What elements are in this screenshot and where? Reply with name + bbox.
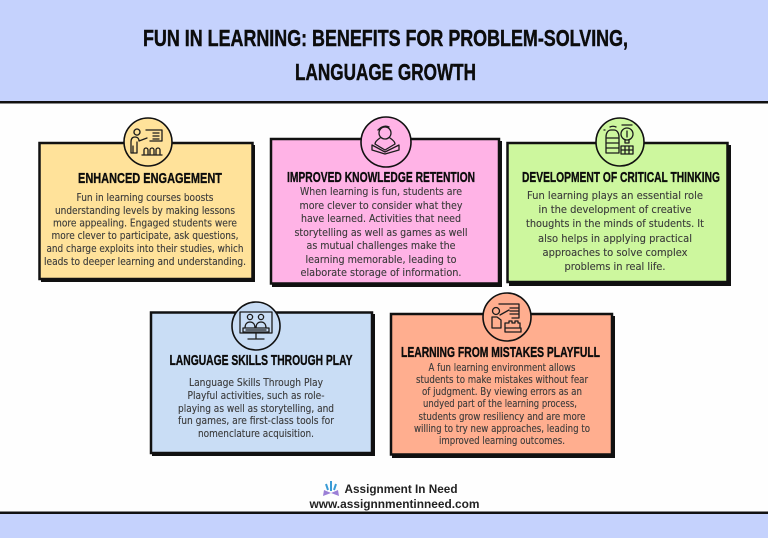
body text: students to make mistakes without fear xyxy=(416,375,589,386)
body text: undyed part of the learning process, xyxy=(423,399,577,410)
title xyxy=(143,25,628,85)
body text: nomenclature acquisition. xyxy=(198,429,314,440)
icon: reader with book xyxy=(361,117,411,167)
body text xyxy=(44,193,246,268)
body text xyxy=(414,363,590,447)
heading: LEARNING FROM MISTAKES PLAYFULL xyxy=(401,344,600,361)
icon: teacher with students xyxy=(124,118,172,166)
body text xyxy=(526,191,704,273)
header band xyxy=(0,0,768,104)
body text: Playful activities, such as role- xyxy=(188,391,325,402)
body text: of judgment. By viewing errors as an xyxy=(422,387,582,398)
body text xyxy=(178,378,335,440)
body text: approaches to solve complex xyxy=(542,248,688,259)
body text: students grow resiliency and are more xyxy=(418,412,586,423)
body text: fun games, are first-class tools for xyxy=(178,416,335,427)
body text: storytelling as well as games as well xyxy=(294,228,468,239)
heading: IMPROVED KNOWLEDGE RETENTION xyxy=(287,169,475,186)
body text: more clever to consider what they xyxy=(300,201,462,212)
body text: in the development of creative xyxy=(538,205,692,216)
body text: learning memorable, leading to xyxy=(306,255,456,266)
body text: thoughts in the minds of students. It xyxy=(526,219,704,230)
body text: have learned. Activities that need xyxy=(301,214,461,225)
icon: brand logo xyxy=(323,481,339,496)
body text: Fun learning plays an essential role xyxy=(527,191,703,202)
body text: Fun in learning courses boosts xyxy=(76,193,214,204)
panel: enhanced engagement xyxy=(40,118,255,282)
panel: language skills through play xyxy=(151,302,375,456)
body text: and charge exploits into their studies, which xyxy=(46,244,244,255)
body text: When learning is fun, students are xyxy=(300,187,462,198)
body text: willing to try new approaches, leading to xyxy=(414,424,590,435)
panel: development of critical thinking xyxy=(508,118,731,286)
body text: understanding levels by making lessons xyxy=(55,206,235,217)
body text: also helps in applying practical xyxy=(538,234,692,245)
panel: improved knowledge retention xyxy=(271,117,502,287)
brand name and website: Assignment In Need xyxy=(344,482,458,496)
body text: A fun learning environment allows xyxy=(428,363,576,374)
body text xyxy=(294,187,468,279)
body text: more clever to participate, ask questions, xyxy=(52,231,238,242)
body text: Language Skills Through Play xyxy=(189,378,323,389)
body text: problems in real life. xyxy=(564,262,666,273)
brand name and website xyxy=(309,482,480,511)
body text: leads to deeper learning and understanding. xyxy=(44,257,246,268)
body text: elaborate storage of information. xyxy=(300,268,462,279)
panel: learning from mistakes playfull xyxy=(391,293,615,458)
heading: ENHANCED ENGAGEMENT xyxy=(78,170,222,187)
body text: improved learning outcomes. xyxy=(439,436,565,447)
body text: more appealing. Engaged students were xyxy=(53,218,237,230)
body text: as mutual challenges make the xyxy=(306,241,456,252)
icon: two people on a monitor xyxy=(232,302,280,350)
icon: books and light bulb xyxy=(596,118,644,166)
brand name and website: www.assignnmentinneed.com xyxy=(309,497,480,511)
title: LANGUAGE GROWTH xyxy=(295,59,476,85)
body text: playing as well as storytelling, and xyxy=(178,404,334,415)
footer band xyxy=(0,512,768,538)
heading: LANGUAGE SKILLS THROUGH PLAY xyxy=(170,352,352,369)
title: FUN IN LEARNING: BENEFITS FOR PROBLEM-SOLVING, xyxy=(143,25,628,51)
icon: teacher at a board with blocks xyxy=(483,293,531,341)
